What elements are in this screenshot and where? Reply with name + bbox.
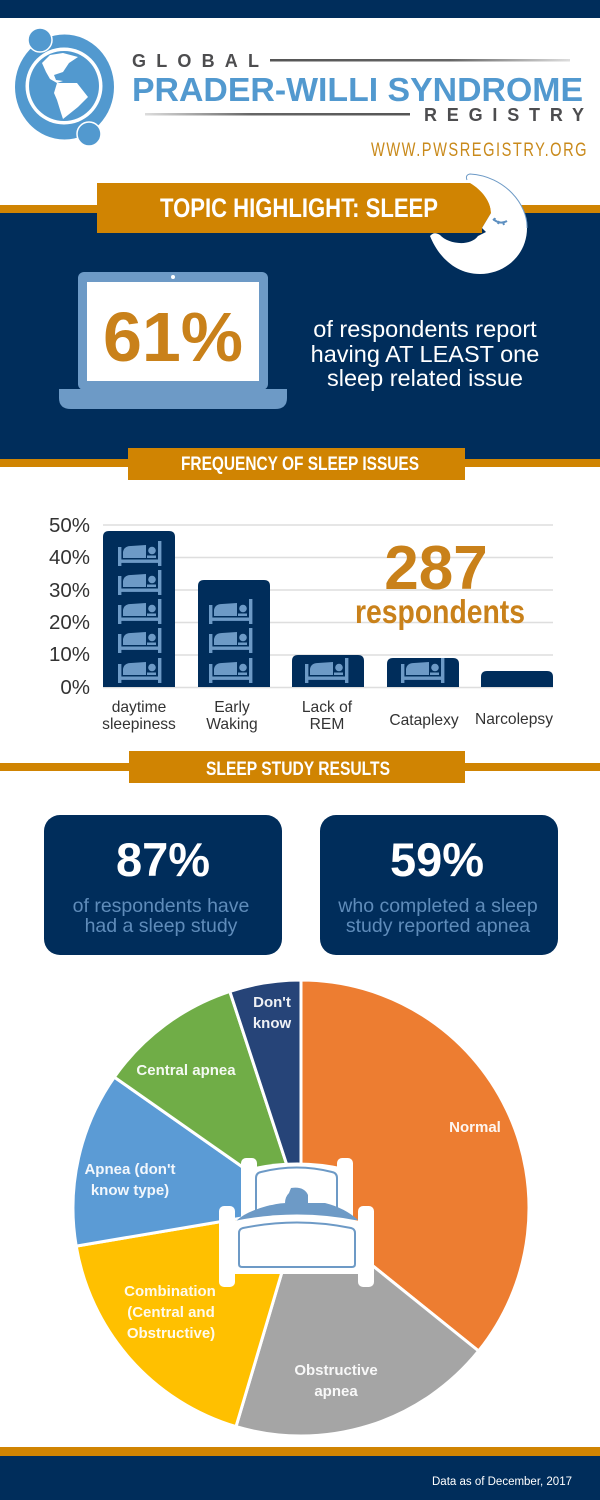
gold rule right xyxy=(520,205,600,213)
bed icon xyxy=(219,1158,374,1287)
heading: sleep study: SLEEP STUDY RESULTS xyxy=(206,759,390,780)
gold rule xyxy=(0,763,600,771)
website url: WWW.PWSREGISTRY.ORG xyxy=(371,139,588,160)
bar chart: Narcolepsy xyxy=(475,711,553,728)
card: 87%: had a sleep study xyxy=(85,915,238,937)
bar chart: 10% xyxy=(49,643,90,666)
pie labels: Obstructive xyxy=(294,1362,378,1379)
stat description: sleep related issue xyxy=(327,365,523,391)
card: 59% xyxy=(320,815,558,955)
card: 87%: 87% xyxy=(116,833,210,886)
pie labels xyxy=(84,994,501,1400)
card: 87% xyxy=(44,815,282,955)
pie labels: apnea xyxy=(314,1383,358,1400)
footer: Data as of December, 2017 xyxy=(432,1476,572,1488)
pie labels: Normal xyxy=(449,1119,501,1136)
logo globe xyxy=(15,28,114,146)
stat description: having AT LEAST one xyxy=(311,341,539,367)
card: 87%: of respondents have xyxy=(73,895,249,917)
bar chart: REM xyxy=(310,716,344,733)
card: 59%: 59% xyxy=(390,833,484,886)
card: 59%: study reported apnea xyxy=(346,915,530,937)
navy hero section xyxy=(0,213,600,459)
pie labels: (Central and xyxy=(127,1304,215,1321)
pie labels: Combination xyxy=(124,1283,216,1300)
bar chart: Cataplexy xyxy=(389,712,459,729)
pie labels: know type) xyxy=(91,1182,169,1199)
footer xyxy=(0,1447,600,1500)
laptop icon xyxy=(59,272,287,409)
heading: sleep study xyxy=(129,751,465,783)
logo wordmark xyxy=(132,51,584,125)
bar chart: daytime xyxy=(112,699,166,716)
pie labels: Apnea (don't xyxy=(84,1161,176,1178)
respondents count: 287 xyxy=(384,534,488,603)
stat description: of respondents report xyxy=(313,316,537,342)
stat: 61%: 61% xyxy=(103,298,243,376)
logo wordmark: PRADER-WILLI SYNDROME xyxy=(132,72,583,109)
bar chart xyxy=(49,514,553,733)
title banner: TOPIC HIGHLIGHT: SLEEP xyxy=(160,193,438,223)
bar chart: Lack of xyxy=(302,699,353,716)
pie labels: Don't xyxy=(253,994,291,1011)
pie labels: Obstructive) xyxy=(127,1325,215,1342)
title banner xyxy=(97,183,491,233)
bar chart: Early xyxy=(214,699,250,716)
card: 59%: who completed a sleep xyxy=(337,895,538,917)
logo wordmark: REGISTRY xyxy=(424,105,584,125)
bar chart: 20% xyxy=(49,611,90,634)
stat description xyxy=(311,316,539,391)
bar chart: 0% xyxy=(60,676,90,699)
gold rule xyxy=(0,459,600,467)
pie labels: know xyxy=(253,1015,291,1032)
bar chart: 30% xyxy=(49,579,90,602)
bar chart: 50% xyxy=(49,514,90,537)
gold rule left xyxy=(0,205,100,213)
bar chart: 40% xyxy=(49,546,90,569)
bar chart: Waking xyxy=(206,716,258,733)
logo wordmark: GLOBAL xyxy=(132,51,259,71)
bar chart: sleepiness xyxy=(102,716,176,733)
heading: frequency xyxy=(128,448,465,480)
pie labels: Central apnea xyxy=(136,1062,236,1079)
pie chart xyxy=(73,980,529,1436)
moon icon xyxy=(430,174,527,274)
respondents count xyxy=(355,534,525,630)
respondents count: respondents xyxy=(355,593,525,630)
top band xyxy=(0,0,600,18)
heading: frequency: FREQUENCY OF SLEEP ISSUES xyxy=(181,454,419,475)
